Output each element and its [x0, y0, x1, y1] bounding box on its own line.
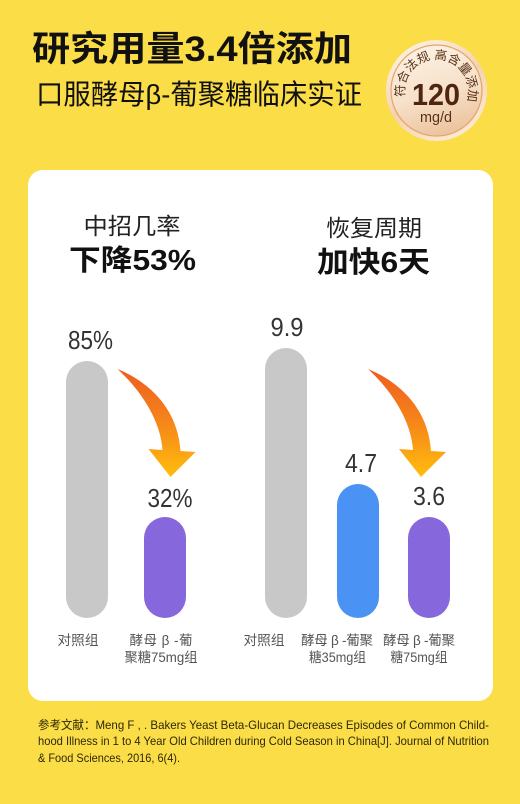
panel: white chart card [28, 170, 493, 701]
label: 75mg: 聚糖75mg组 [124, 650, 198, 665]
arrow: left decline [118, 369, 196, 477]
right chart heading: 加快6天 [317, 246, 430, 279]
label: 75mg: 糖75mg组 [390, 650, 448, 665]
badge: 120 mg/d: 120 [412, 77, 460, 112]
bar: control 85% [66, 325, 113, 618]
right bar chart [244, 312, 456, 665]
left chart heading: 中招几率 [84, 213, 180, 239]
title: 研究用量3.4倍添加 [32, 30, 352, 69]
references text: hood Illness in 1 to 4 Year Old Children during Cold Season in China[J]. Journal of Nutrition [38, 734, 489, 748]
label: 75mg: 酵母 β -葡 [130, 633, 192, 648]
badge: 120 mg/d [386, 40, 487, 141]
bar: 35mg 4.7: 4.7 [345, 448, 377, 478]
bar: control 85%: 85% [68, 325, 113, 355]
label: 35mg: 糖35mg组 [309, 650, 366, 665]
subtitle: 口服酵母β-葡聚糖临床实证 [36, 79, 362, 110]
left chart heading: 下降53% [69, 244, 196, 277]
bar: control 9.9: 9.9 [270, 312, 304, 342]
label: 75mg [383, 633, 456, 665]
right chart heading: 恢复周期 [326, 215, 422, 241]
references text: & Food Sciences, 2016, 6(4). [38, 751, 180, 765]
references text [38, 717, 489, 765]
left chart heading [69, 213, 196, 277]
references text: 参考文献：Meng F , . Bakers Yeast Beta-Glucan Decreases Episodes of Common Child- [38, 717, 489, 732]
bar: 75mg 32%: 32% [148, 483, 192, 513]
label: 75mg: 酵母 β -葡聚 [383, 633, 456, 648]
label: control: 对照组 [244, 633, 284, 648]
label: control: 对照组 [58, 633, 98, 648]
right chart heading [317, 215, 430, 279]
label: 35mg: 酵母 β -葡聚 [301, 633, 374, 648]
bar: 75mg 32% [144, 483, 192, 618]
bar: control 9.9 [265, 312, 307, 618]
left bar chart [58, 325, 198, 665]
bar: 35mg 4.7 [337, 448, 379, 618]
badge: 120 mg/d: mg/d [420, 109, 452, 126]
label: 75mg [124, 633, 198, 665]
bar: 75mg 3.6 [408, 481, 450, 618]
bar: 75mg 3.6: 3.6 [413, 481, 445, 511]
label: 35mg [301, 633, 374, 665]
badge: 120 mg/d: 符合法规 高含量添加 [394, 49, 479, 102]
arrow: right decline [368, 369, 446, 477]
